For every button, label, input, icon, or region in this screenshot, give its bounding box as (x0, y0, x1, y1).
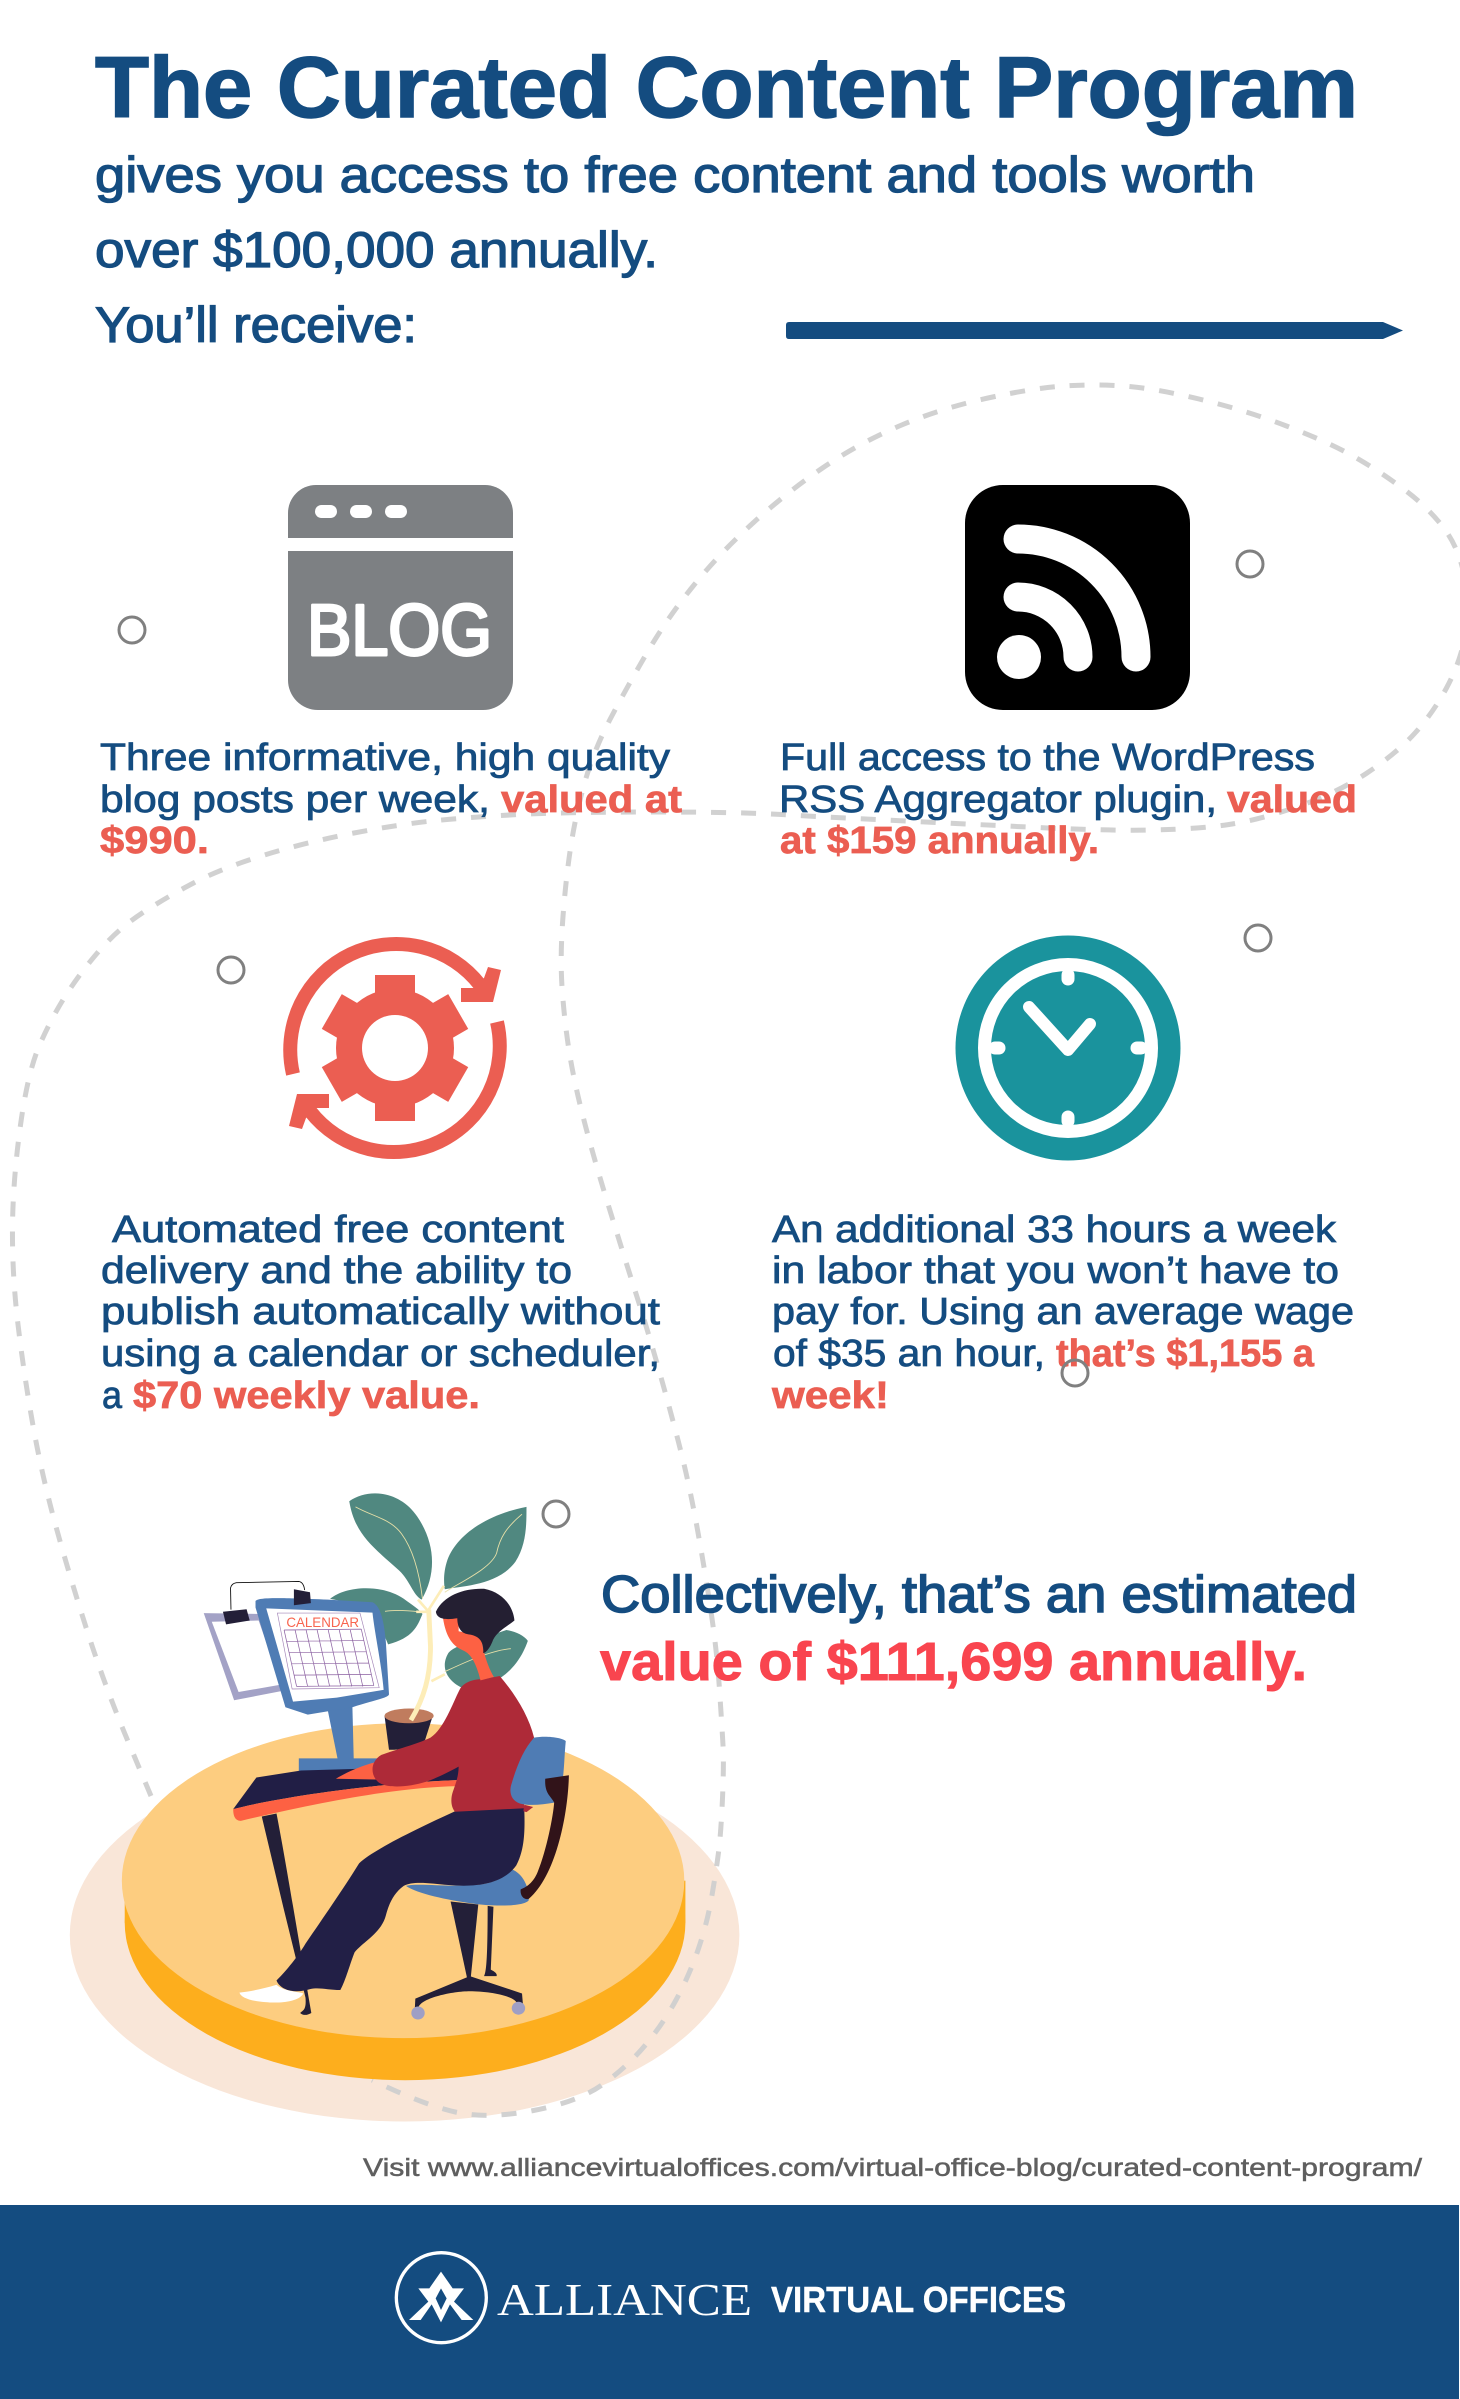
computer monitor with calendar: CALENDAR (286, 1614, 359, 1630)
subtitle text block (95, 147, 1255, 353)
text block: RSS plugin: valued (1227, 779, 1357, 821)
desk (233, 1766, 462, 2015)
footer band (0, 2205, 1459, 2399)
company name: VIRTUAL OFFICES (771, 2279, 1066, 2320)
icon: blog window (288, 485, 513, 710)
decorative ring markers (119, 551, 1271, 1527)
text block: automated delivery (101, 1209, 661, 1417)
subtitle text block: You’ll receive: (95, 297, 417, 353)
text block: labor savings (771, 1209, 1354, 1417)
summary text block: value of $111,699 annually. (600, 1632, 1307, 1692)
text block: labor savings: An additional 33 hours a week (772, 1209, 1337, 1251)
text block: automated delivery: Automated free content (112, 1209, 565, 1251)
text block: labor savings: week! (771, 1375, 889, 1417)
person (239, 1589, 534, 2003)
chair backrest (510, 1737, 569, 1899)
text block: RSS plugin: at $159 annually. (780, 820, 1099, 862)
text block: blog posts (100, 737, 682, 862)
subtitle text block: over $100,000 annually. (95, 222, 658, 278)
platform disc (122, 1723, 685, 2080)
summary text block (600, 1566, 1357, 1692)
text block: labor savings: pay for. Using an average wage (772, 1291, 1354, 1333)
summary text block: Collectively, that’s an estimated (601, 1566, 1357, 1624)
text block: RSS plugin: RSS Aggregator plugin, (779, 779, 1217, 821)
icon: gear with cycle arrows (289, 944, 501, 1152)
plant pot and stem (385, 1586, 445, 1750)
pale shadow ellipse under platform (70, 1748, 739, 2122)
text block: automated delivery: using a calendar or scheduler, (101, 1333, 660, 1375)
company name (497, 2275, 1066, 2325)
subtitle text block: gives you access to free content and tools worth (95, 147, 1255, 203)
arrow bar (786, 322, 1403, 339)
text block: blog posts: $990. (100, 820, 209, 862)
clipboard (204, 1581, 305, 1700)
company name: ALLIANCE (497, 2275, 752, 2325)
icon: blog window: BLOG (307, 591, 492, 671)
text block: blog posts: blog posts per week, (100, 779, 490, 821)
text block: labor savings: of $35 an hour, (773, 1333, 1045, 1375)
text block: automated delivery: a (102, 1375, 123, 1417)
computer monitor with calendar (256, 1589, 389, 1780)
title: The Curated Content Program (95, 40, 1358, 136)
text block: RSS plugin (779, 737, 1357, 862)
icon: clock (956, 936, 1180, 1160)
chair (406, 1869, 529, 2019)
text block: RSS plugin: Full access to the WordPress (780, 737, 1315, 779)
text block: blog posts: Three informative, high quality (100, 737, 670, 779)
text block: automated delivery: publish automatically without (101, 1291, 661, 1333)
text block: labor savings: in labor that you won’t have to (772, 1250, 1339, 1292)
website link: Visit www.alliancevirtualoffices.com/virtual-office-blog/curated-content-program/ (363, 2154, 1422, 2182)
illustration: person working at desk on platform (122, 1493, 685, 2080)
text block: automated delivery: $70 weekly value. (133, 1375, 480, 1417)
text block: labor savings: that’s $1,155 a (1056, 1333, 1315, 1375)
logo mark (396, 2253, 486, 2343)
icon: RSS feed (965, 485, 1190, 710)
text block: blog posts: valued at (501, 779, 682, 821)
plant leaves (330, 1493, 528, 1688)
text block: automated delivery: delivery and the ability to (101, 1250, 572, 1292)
